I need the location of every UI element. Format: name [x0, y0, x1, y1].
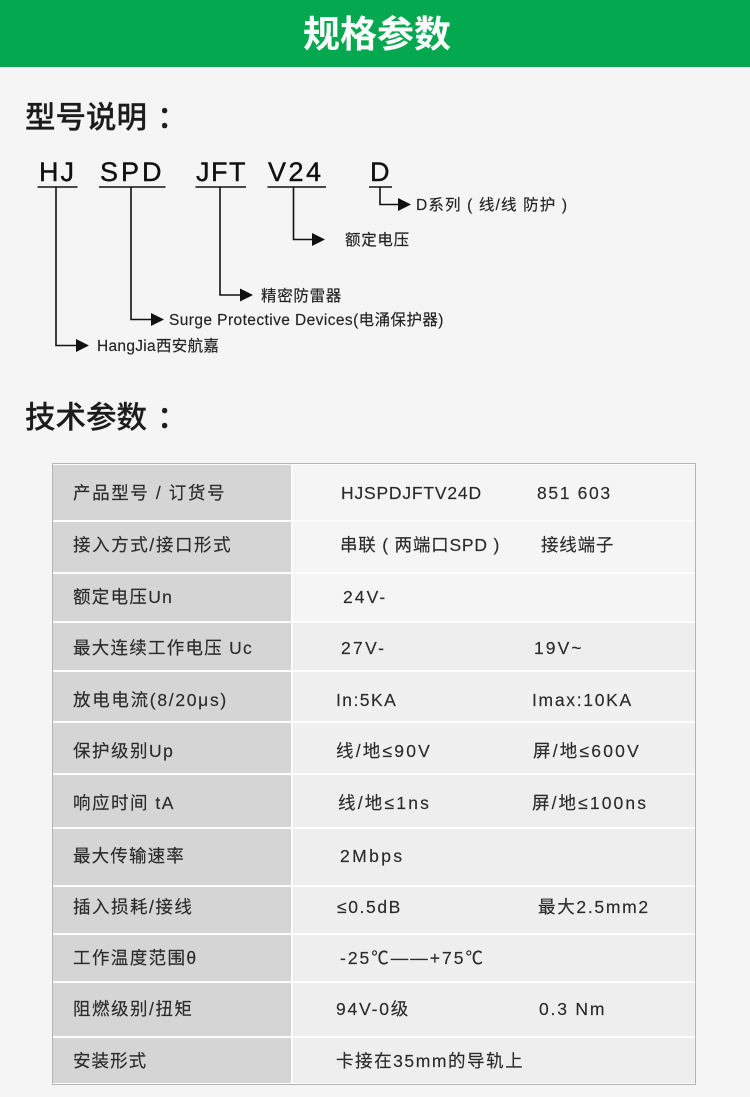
code: D: D: [370, 157, 390, 187]
row: response time: [53, 775, 695, 827]
row: max continuous voltage: 19V~: [534, 638, 584, 658]
row: flame rating: 阻燃级别/扭矩: [73, 999, 193, 1019]
row: protection level: 屏/地≤600V: [533, 741, 641, 761]
row: connection type: 接入方式/接口形式: [73, 535, 232, 555]
row: response time: 线/地≤1ns: [338, 793, 431, 813]
row: protection level: 线/地≤90V: [336, 741, 432, 761]
code: HJ: HJ: [39, 157, 76, 187]
heading: model description: 型号说明 ：: [25, 101, 188, 135]
row: protection level: 保护级别Up: [73, 741, 174, 761]
code segments with connector arrows: [38, 186, 411, 352]
note: HangJia: HangJia西安航嘉: [97, 338, 219, 355]
row: product model: 851 603: [537, 483, 612, 503]
row: max transfer rate: [53, 829, 695, 885]
row: product model: HJSPDJFTV24D: [341, 483, 482, 503]
row: insertion loss: [53, 887, 695, 933]
row: max transfer rate: 2Mbps: [340, 846, 405, 866]
row: product model: [53, 465, 612, 520]
row: discharge current: 放电电流(8/20μs): [73, 690, 228, 710]
header banner: [0, 0, 750, 67]
code: JFT: JFT: [196, 157, 247, 187]
row: discharge current: In:5KA: [336, 690, 397, 710]
row: rated voltage: 额定电压Un: [73, 587, 173, 607]
row: discharge current: [53, 672, 695, 721]
row: rated voltage: 24V-: [343, 587, 387, 607]
row: mounting: 卡接在35mm的导轨上: [336, 1051, 524, 1071]
row: max continuous voltage: [53, 623, 695, 670]
row: mounting: 安装形式: [73, 1051, 147, 1071]
row: operating temperature: [53, 935, 695, 981]
row: flame rating: 94V-0级: [336, 999, 410, 1019]
title: 规格参数: [303, 14, 451, 55]
row: discharge current: Imax:10KA: [532, 690, 633, 710]
model code diagram: [38, 157, 568, 355]
row: insertion loss: 最大2.5mm2: [538, 897, 650, 917]
row: operating temperature: 工作温度范围θ: [73, 948, 198, 968]
row: insertion loss: ≤0.5dB: [337, 897, 402, 917]
parameter table: [52, 463, 696, 1085]
row: protection level: [53, 723, 695, 773]
row: operating temperature: -25℃——+75℃: [340, 948, 485, 968]
row: mounting: [53, 1038, 695, 1083]
note: D series: D系列 ( 线/线 防护 ): [416, 197, 568, 214]
row: rated voltage: [53, 574, 387, 621]
note: precision arrester: 精密防雷器: [261, 288, 342, 305]
row: response time: 屏/地≤100ns: [532, 793, 648, 813]
heading: technical parameters: 技术参数 ：: [25, 401, 188, 435]
row: connection type: 串联 ( 两端口SPD ): [340, 535, 500, 555]
row: max transfer rate: 最大传输速率: [73, 846, 185, 866]
row: connection type: 接线端子: [541, 535, 614, 555]
note: surge protective devices: Surge Protective Devices(电涌保护器): [169, 312, 444, 329]
row: connection type: [53, 522, 614, 572]
row: max continuous voltage: 27V-: [341, 638, 386, 658]
note: rated voltage: 额定电压: [345, 232, 410, 249]
row: flame rating: [53, 983, 695, 1036]
row: response time: 响应时间 tA: [73, 793, 175, 813]
row: product model: 产品型号 / 订货号: [73, 483, 226, 503]
row: max continuous voltage: 最大连续工作电压 Uc: [73, 638, 253, 658]
code: V24: V24: [268, 157, 324, 187]
code: SPD: SPD: [100, 157, 165, 187]
row: insertion loss: 插入损耗/接线: [73, 897, 193, 917]
row: flame rating: 0.3 Nm: [539, 999, 606, 1019]
